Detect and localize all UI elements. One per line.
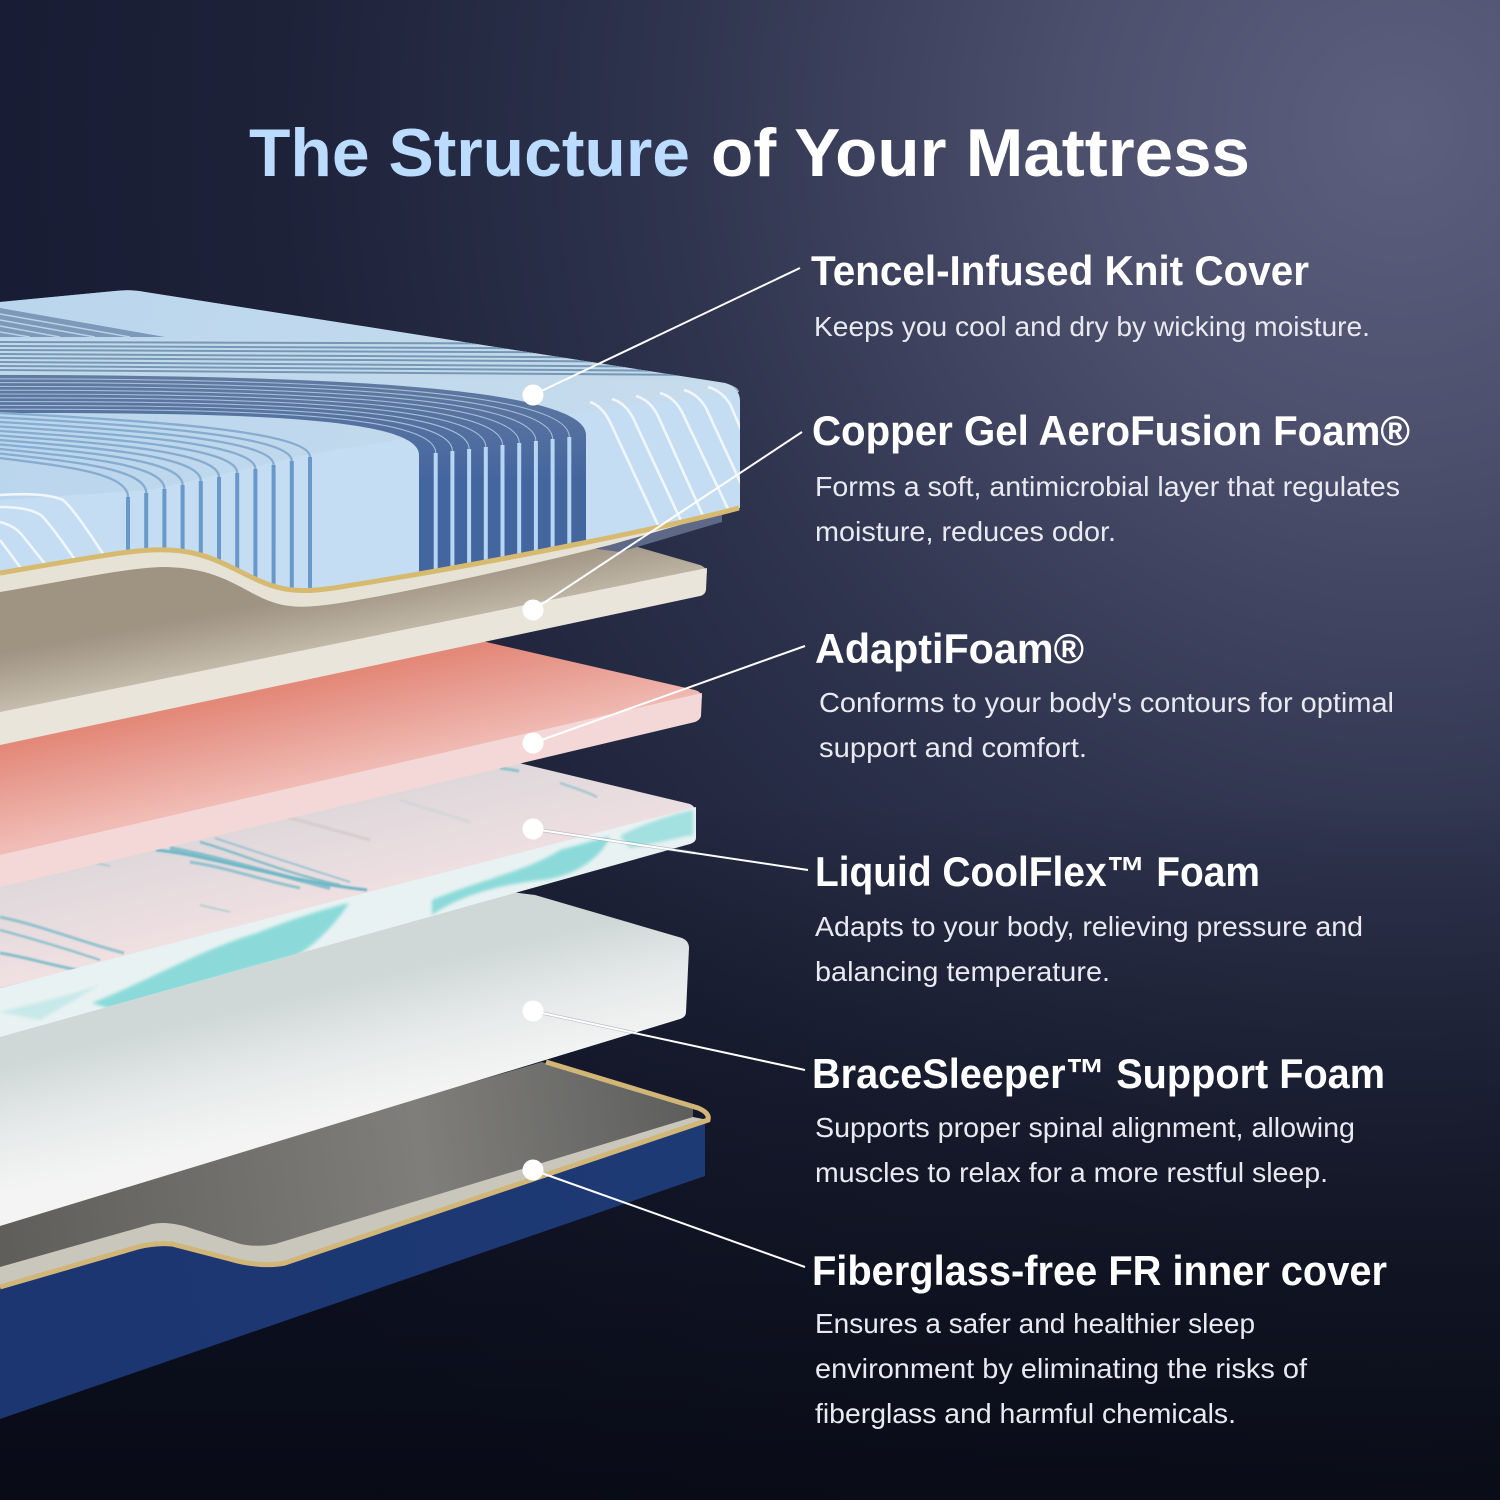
cover top surface xyxy=(0,290,739,500)
text block: Fiberglass-free FR inner cover: Ensures a safer and healthier sleep xyxy=(815,1308,1255,1339)
text block: BraceSleeper Support Foam xyxy=(812,1050,1385,1188)
pink side face xyxy=(0,693,702,887)
layer: Copper Gel AeroFusion foam xyxy=(0,500,707,745)
layer: Liquid CoolFlex foam xyxy=(0,763,696,1037)
text block: AdaptiFoam: Conforms to your body's contours for optimal xyxy=(819,687,1394,718)
layer: Tencel-infused knit cover xyxy=(0,290,780,607)
upper light stripe band xyxy=(0,339,678,376)
title xyxy=(249,115,1250,191)
text block: Liquid CoolFlex Foam: Liquid CoolFlex™ Foam xyxy=(815,848,1260,895)
cream lip xyxy=(0,1117,708,1287)
layer: AdaptiFoam xyxy=(0,641,702,887)
grey inner surface xyxy=(0,1062,693,1269)
grey-blue underside xyxy=(580,512,722,552)
text block: Copper Gel AeroFusion Foam: Forms a soft, antimicrobial layer that regulates xyxy=(815,471,1400,502)
text block: Fiberglass-free FR inner cover: fiberglass and harmful chemicals. xyxy=(815,1398,1236,1429)
blue base xyxy=(0,1120,709,1419)
layer: BraceSleeper support foam xyxy=(0,888,689,1226)
gold edge xyxy=(0,508,739,591)
text block: Tencel-Infused Knit Cover: Keeps you cool and dry by wicking moisture. xyxy=(814,311,1370,342)
gold edge xyxy=(0,1062,708,1287)
dark stripe band over side xyxy=(0,375,586,572)
text block: AdaptiFoam xyxy=(815,625,1394,763)
text block: BraceSleeper Support Foam: muscles to relax for a more restful sleep. xyxy=(815,1157,1328,1188)
text block: Liquid CoolFlex Foam xyxy=(815,848,1363,987)
beige top face xyxy=(0,500,707,712)
marble top face xyxy=(0,763,696,988)
text block: Fiberglass-free FR inner cover: Fiberglass-free FR inner cover xyxy=(812,1247,1387,1294)
text block: BraceSleeper Support Foam: BraceSleeper™ Support Foam xyxy=(812,1050,1385,1097)
white diagonal lines right xyxy=(590,386,740,525)
title: The Structure xyxy=(249,115,690,191)
layer: fiberglass-free inner cover and blue base xyxy=(0,1062,709,1419)
text block: Copper Gel AeroFusion Foam: moisture, reduces odor. xyxy=(815,516,1116,547)
left light stripe band over side xyxy=(0,413,310,600)
pink top face xyxy=(0,641,702,855)
text block: Copper Gel AeroFusion Foam xyxy=(812,407,1410,547)
back diagonal stripe band xyxy=(0,308,165,337)
text block: Copper Gel AeroFusion Foam: Copper Gel AeroFusion Foam® xyxy=(812,407,1410,454)
callout dots xyxy=(522,384,544,1180)
text block: Fiberglass-free FR inner cover: environment by eliminating the risks of xyxy=(815,1353,1307,1384)
beige side face xyxy=(0,568,707,745)
cover body xyxy=(0,290,740,591)
text block: Fiberglass-free FR inner cover xyxy=(812,1247,1387,1429)
text block: Tencel-Infused Knit Cover xyxy=(811,247,1370,342)
title: of Your Mattress xyxy=(711,115,1250,191)
text block: AdaptiFoam: AdaptiFoam® xyxy=(815,625,1084,672)
text block: Tencel-Infused Knit Cover: Tencel-Infused Knit Cover xyxy=(811,247,1309,294)
text block: BraceSleeper Support Foam: Supports proper spinal alignment, allowing xyxy=(815,1112,1355,1143)
leader lines xyxy=(533,268,808,1267)
text block: Liquid CoolFlex Foam: Adapts to your body, relieving pressure and xyxy=(815,911,1363,942)
white diagonal lines left xyxy=(0,494,107,575)
marble side face xyxy=(0,807,696,1037)
teal swirls on side xyxy=(0,810,693,1020)
text block: AdaptiFoam: support and comfort. xyxy=(819,732,1087,763)
teal streaks on top xyxy=(0,768,597,970)
cream lip under cover xyxy=(0,508,739,607)
text block: Liquid CoolFlex Foam: balancing temperature. xyxy=(815,956,1110,987)
